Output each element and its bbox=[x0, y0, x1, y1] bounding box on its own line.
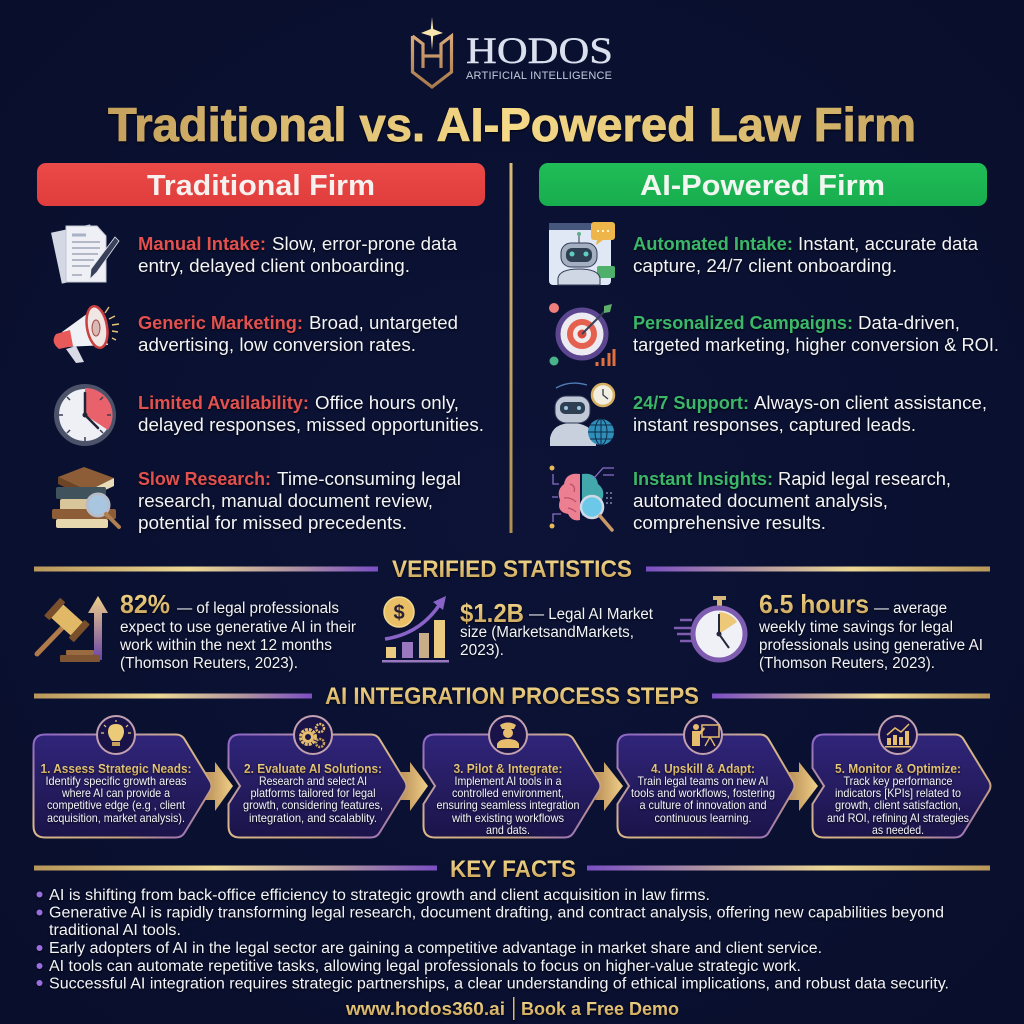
logo wordmark: HODOS bbox=[466, 31, 613, 72]
heading: process steps: AI INTEGRATION PROCESS STEPS bbox=[325, 683, 699, 710]
row: manual intake bbox=[138, 233, 458, 276]
icon: books and magnifier bbox=[52, 467, 119, 528]
arrow: step 4 to 5 bbox=[789, 762, 818, 811]
row: instant insights: Rapid legal research, bbox=[778, 468, 951, 489]
step text: Implement AI tools in a bbox=[454, 774, 562, 788]
row: manual intake: Manual Intake: bbox=[138, 233, 266, 254]
key facts list: Successful AI integration requires strategic partnerships, a clear understanding of ethical implications, and robust data security. bbox=[49, 976, 949, 992]
logo bbox=[412, 17, 613, 87]
key facts list: traditional AI tools. bbox=[49, 922, 181, 939]
row: slow research: Time-consuming legal bbox=[277, 468, 461, 489]
step 3: pilot and integrate bbox=[424, 716, 600, 838]
row: 24/7 support bbox=[633, 392, 987, 435]
key facts list: Early adopters of AI in the legal sector are gaining a competitive advantage in market share and client service. bbox=[49, 940, 822, 957]
panel: statistics bbox=[37, 589, 983, 672]
icon: megaphone bbox=[54, 305, 119, 363]
step text: integration, and scalablity. bbox=[249, 811, 377, 825]
row: slow research: potential for missed precedents. bbox=[138, 512, 407, 533]
row: generic marketing: Generic Marketing: bbox=[138, 312, 303, 333]
icon: target with dart bbox=[549, 303, 614, 366]
step text bbox=[243, 761, 383, 825]
footer call to action bbox=[345, 997, 679, 1020]
step 2: evaluate ai solutions bbox=[228, 716, 406, 838]
row: automated intake: Instant, accurate data bbox=[798, 233, 979, 254]
logo tagline: ARTIFICIAL INTELLIGENCE bbox=[466, 70, 612, 82]
heading: ai-powered firm: AI-Powered Firm bbox=[640, 170, 885, 202]
step text: 1. Assess Strategic Neads: bbox=[40, 761, 192, 776]
stat: 6.5 hours: 6.5 hours bbox=[759, 589, 869, 619]
step text bbox=[40, 761, 192, 825]
icon: growth chart bbox=[879, 716, 917, 754]
key facts list: AI tools can automate repetitive tasks, allowing legal professionals to focus on higher-value strategic work. bbox=[49, 958, 801, 975]
stat: 82%: — of legal professionals bbox=[177, 600, 339, 617]
icon: clock bbox=[56, 386, 114, 444]
heading: traditional firm: Traditional Firm bbox=[147, 170, 375, 202]
row: slow research bbox=[138, 468, 461, 533]
row: limited availability: Limited Availability: bbox=[138, 392, 309, 413]
stat: 6.5 hours: weekly time savings for legal bbox=[758, 619, 953, 636]
row: instant insights bbox=[633, 468, 951, 533]
heading: traditional firm bbox=[37, 163, 485, 206]
step text bbox=[436, 761, 580, 837]
step text: growth, client satisfaction, bbox=[835, 798, 961, 812]
stat: $1.2B bbox=[460, 598, 654, 659]
stat: 82%: 82% bbox=[120, 589, 170, 619]
row: automated intake: capture, 24/7 client onboarding. bbox=[633, 255, 897, 276]
step 1: assess strategic needs bbox=[34, 716, 212, 838]
title: Traditional vs. AI-Powered Law Firm bbox=[108, 98, 916, 151]
icon: stopwatch bbox=[674, 596, 745, 660]
key facts list: Generative AI is rapidly transforming legal research, document drafting, and contract analysis, offering new capabilities beyond bbox=[49, 904, 944, 922]
heading: verified statistics: VERIFIED STATISTICS bbox=[392, 556, 632, 583]
row: generic marketing bbox=[138, 312, 458, 355]
step text: 4. Upskill & Adapt: bbox=[651, 761, 755, 776]
step 5: monitor and optimize bbox=[812, 716, 990, 838]
stat: 82%: work within the next 12 months bbox=[119, 637, 332, 654]
step text: 3. Pilot & Integrate: bbox=[454, 761, 562, 776]
row: personalized campaigns: Personalized Campaigns: bbox=[633, 312, 853, 333]
icon: brain with magnifier bbox=[550, 466, 614, 530]
step text: as needed. bbox=[872, 823, 924, 837]
arrow: step 3 to 4 bbox=[595, 762, 623, 811]
step text: continuous learning. bbox=[654, 811, 752, 825]
step 4: upskill and adapt bbox=[618, 716, 794, 838]
footer call to action: www.hodos360.ai bbox=[345, 998, 505, 1019]
icon: chatbot window bbox=[549, 222, 615, 285]
footer call to action: Book a Free Demo bbox=[521, 998, 679, 1019]
row: instant insights: Instant Insights: bbox=[633, 468, 773, 489]
row: generic marketing: advertising, low conversion rates. bbox=[138, 334, 416, 355]
row: 24/7 support: Always-on client assistance, bbox=[754, 392, 987, 413]
row: limited availability: Office hours only, bbox=[315, 392, 459, 413]
step text: controlled environment, bbox=[452, 786, 564, 800]
icon: gears bbox=[294, 716, 332, 754]
step text: platforms tailored for legal bbox=[250, 786, 376, 800]
stat: $1.2B: size (MarketsandMarkets, bbox=[460, 624, 634, 641]
row: slow research: Slow Research: bbox=[138, 468, 271, 489]
row: automated intake bbox=[633, 233, 979, 276]
stat: 6.5 hours: professionals using generative AI bbox=[759, 637, 983, 654]
stat: $1.2B: $1.2B bbox=[460, 598, 524, 628]
step text: and dats. bbox=[486, 823, 530, 837]
step text: a culture of innovation and bbox=[640, 798, 766, 812]
heading: ai-powered firm bbox=[539, 163, 987, 206]
step text bbox=[631, 761, 775, 825]
row: limited availability bbox=[138, 392, 484, 435]
arrow: step 2 to 3 bbox=[400, 762, 428, 811]
icon: dollar coin and bars: $ bbox=[393, 602, 405, 624]
row: instant insights: comprehensive results. bbox=[633, 512, 826, 533]
stat: $1.2B: 2023). bbox=[460, 642, 504, 659]
section: key facts bbox=[34, 856, 990, 883]
icon: dollar coin and bars bbox=[382, 596, 449, 662]
row: manual intake: entry, delayed client onboarding. bbox=[138, 255, 410, 276]
stat: 82%: expect to use generative AI in their bbox=[120, 619, 356, 636]
step text: Research and select AI bbox=[259, 774, 367, 788]
icon: gavel and up arrow bbox=[37, 596, 108, 662]
row: limited availability: delayed responses, missed opportunities. bbox=[138, 414, 484, 435]
step text: tools and workflows, fostering bbox=[631, 786, 775, 800]
stat: 6.5 hours: — average bbox=[874, 600, 947, 617]
step text: indicators [KPIs] related to bbox=[835, 786, 961, 800]
step text: Identify specific growth areas bbox=[46, 774, 186, 788]
center divider bbox=[510, 163, 512, 533]
step text: growth, considering features, bbox=[243, 798, 383, 812]
step text: where AI can provide a bbox=[61, 786, 170, 800]
section: process steps bbox=[34, 683, 990, 710]
key facts list bbox=[36, 887, 949, 992]
panel: ai-powered firm bbox=[539, 163, 999, 533]
step text bbox=[827, 761, 969, 837]
stat: 82%: (Thomson Reuters, 2023). bbox=[120, 655, 298, 672]
key facts list: AI is shifting from back-office efficiency to strategic growth and client acquisition in law firms. bbox=[49, 887, 710, 904]
row: manual intake: Slow, error-prone data bbox=[272, 233, 458, 254]
icon: light bulb bbox=[97, 716, 135, 754]
step text: 2. Evaluate AI Solutions: bbox=[244, 761, 382, 776]
icon: shield with star bbox=[412, 17, 452, 87]
stat: $1.2B: — Legal AI Market bbox=[529, 606, 654, 623]
step text: 5. Monitor & Optimize: bbox=[835, 761, 961, 776]
row: personalized campaigns bbox=[633, 312, 999, 355]
step text: with existing workflows bbox=[451, 811, 564, 825]
stat: 6.5 hours: (Thomson Reuters, 2023). bbox=[759, 655, 935, 672]
row: automated intake: Automated Intake: bbox=[633, 233, 793, 254]
row: 24/7 support: 24/7 Support: bbox=[633, 392, 749, 413]
heading: key facts: KEY FACTS bbox=[450, 856, 576, 883]
icon: documents and pen bbox=[51, 224, 119, 284]
step text: acquisition, market analysis). bbox=[47, 811, 185, 825]
row: instant insights: automated document analysis, bbox=[633, 490, 888, 511]
row: generic marketing: Broad, untargeted bbox=[309, 312, 458, 333]
arrow: step 1 to 2 bbox=[205, 762, 233, 811]
icon: presenter bbox=[684, 716, 722, 754]
step text: Track key performance bbox=[844, 774, 953, 788]
step text: and ROI, refining AI strategies bbox=[827, 811, 969, 825]
icon: support robot with clock and globe bbox=[550, 383, 614, 446]
row: personalized campaigns: Data-driven, bbox=[858, 312, 960, 333]
section: verified statistics bbox=[34, 556, 990, 583]
step text: Train legal teams on new AI bbox=[638, 774, 768, 788]
step text: competitive edge (e.g , client bbox=[47, 798, 186, 812]
row: 24/7 support: instant responses, captured leads. bbox=[633, 414, 916, 435]
panel: traditional firm bbox=[37, 163, 485, 533]
row: slow research: research, manual document review, bbox=[138, 490, 433, 511]
row: personalized campaigns: targeted marketing, higher conversion & ROI. bbox=[633, 334, 999, 355]
stat: 82% bbox=[119, 589, 356, 672]
icon: pilot bbox=[489, 716, 527, 754]
step text: ensuring seamless integration bbox=[436, 798, 580, 812]
stat: 6.5 hours bbox=[758, 589, 983, 672]
